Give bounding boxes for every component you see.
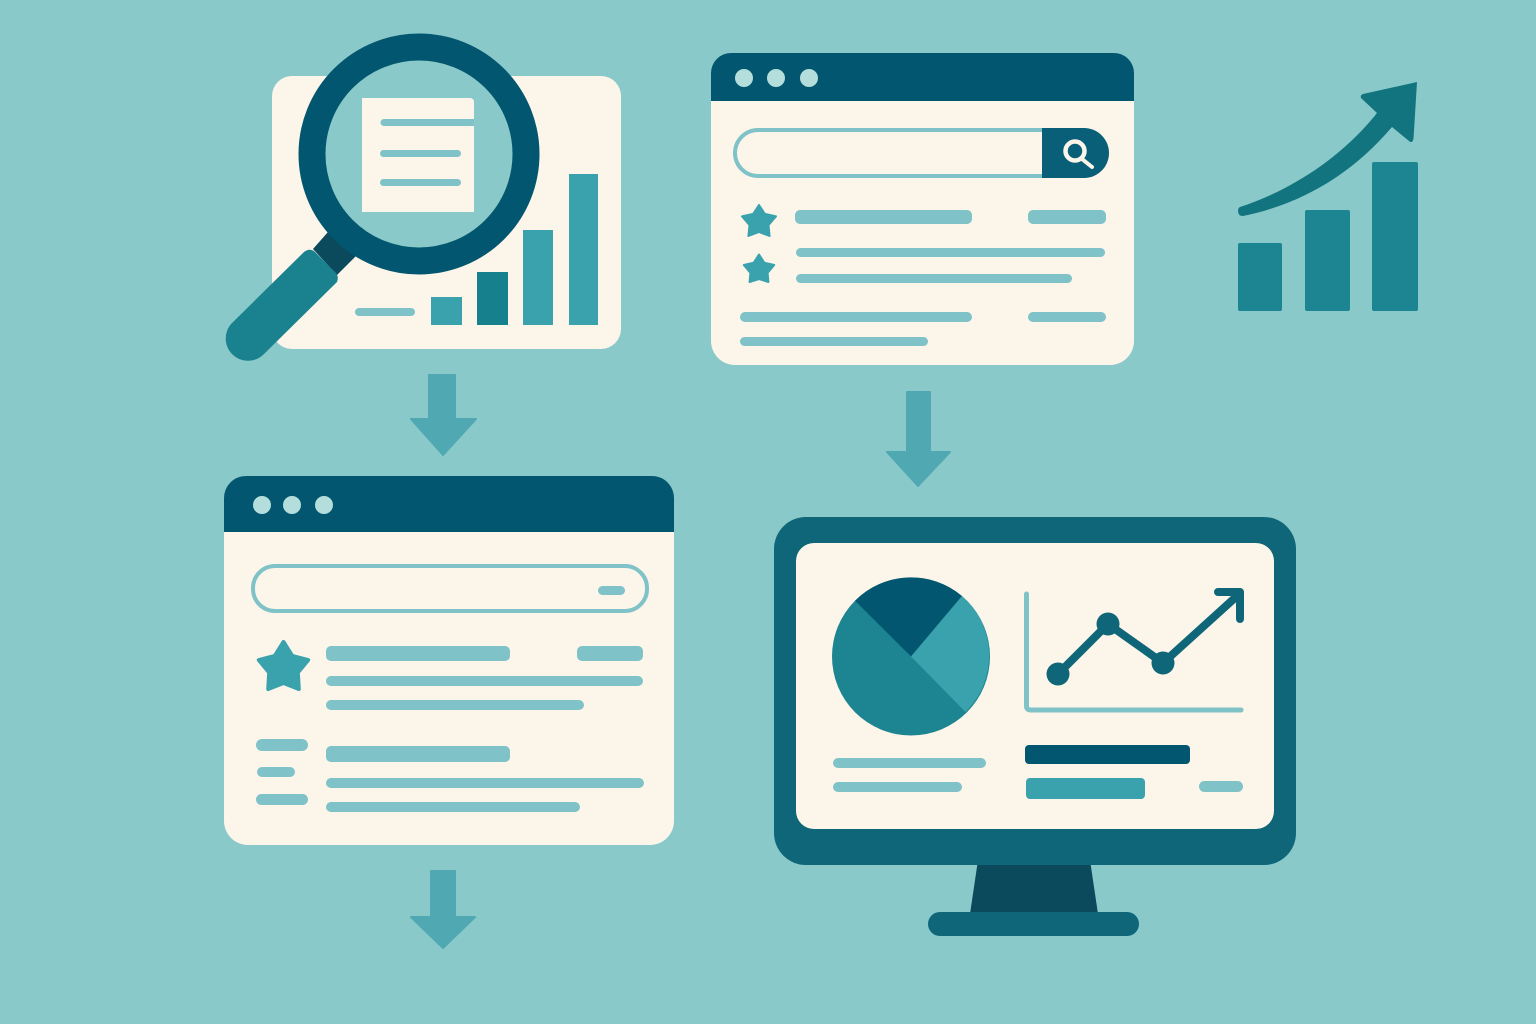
bar chart: rising bars <box>431 174 598 325</box>
monitor stand <box>970 860 1098 914</box>
panel: analytics document under magnifier <box>272 76 621 349</box>
browser title bar <box>711 53 1134 101</box>
monitor base <box>928 912 1139 936</box>
monitor frame <box>774 517 1296 865</box>
dashboard lines <box>833 745 1243 799</box>
arrow: down right <box>887 392 950 486</box>
monitor with dashboard <box>774 517 1296 936</box>
monitor screen <box>796 543 1274 829</box>
icon: magnifying glass with document <box>226 47 526 361</box>
magnifier neck <box>313 232 356 275</box>
magnifier grip <box>226 250 338 361</box>
growth arrow <box>1238 82 1417 216</box>
icon: star <box>259 642 308 689</box>
icon: star large <box>742 205 776 236</box>
result lines <box>740 210 1106 346</box>
line chart <box>1026 592 1241 710</box>
pie chart <box>832 577 990 736</box>
window dots <box>253 496 333 514</box>
arrow: down left top <box>411 375 476 455</box>
panel: search results browser window <box>711 53 1134 365</box>
window dots <box>735 69 818 87</box>
panel: results browser window large <box>224 476 674 845</box>
magnifier lens ring <box>312 47 526 261</box>
chart label line <box>355 308 415 316</box>
magnified document <box>362 98 474 212</box>
search bar <box>253 566 647 611</box>
search bar <box>735 128 1109 178</box>
result lines <box>256 646 644 812</box>
icon: growth chart with arrow <box>1238 82 1418 311</box>
icon: star small <box>744 254 774 282</box>
arrow: down left bottom <box>411 871 475 948</box>
browser title bar <box>224 476 674 532</box>
